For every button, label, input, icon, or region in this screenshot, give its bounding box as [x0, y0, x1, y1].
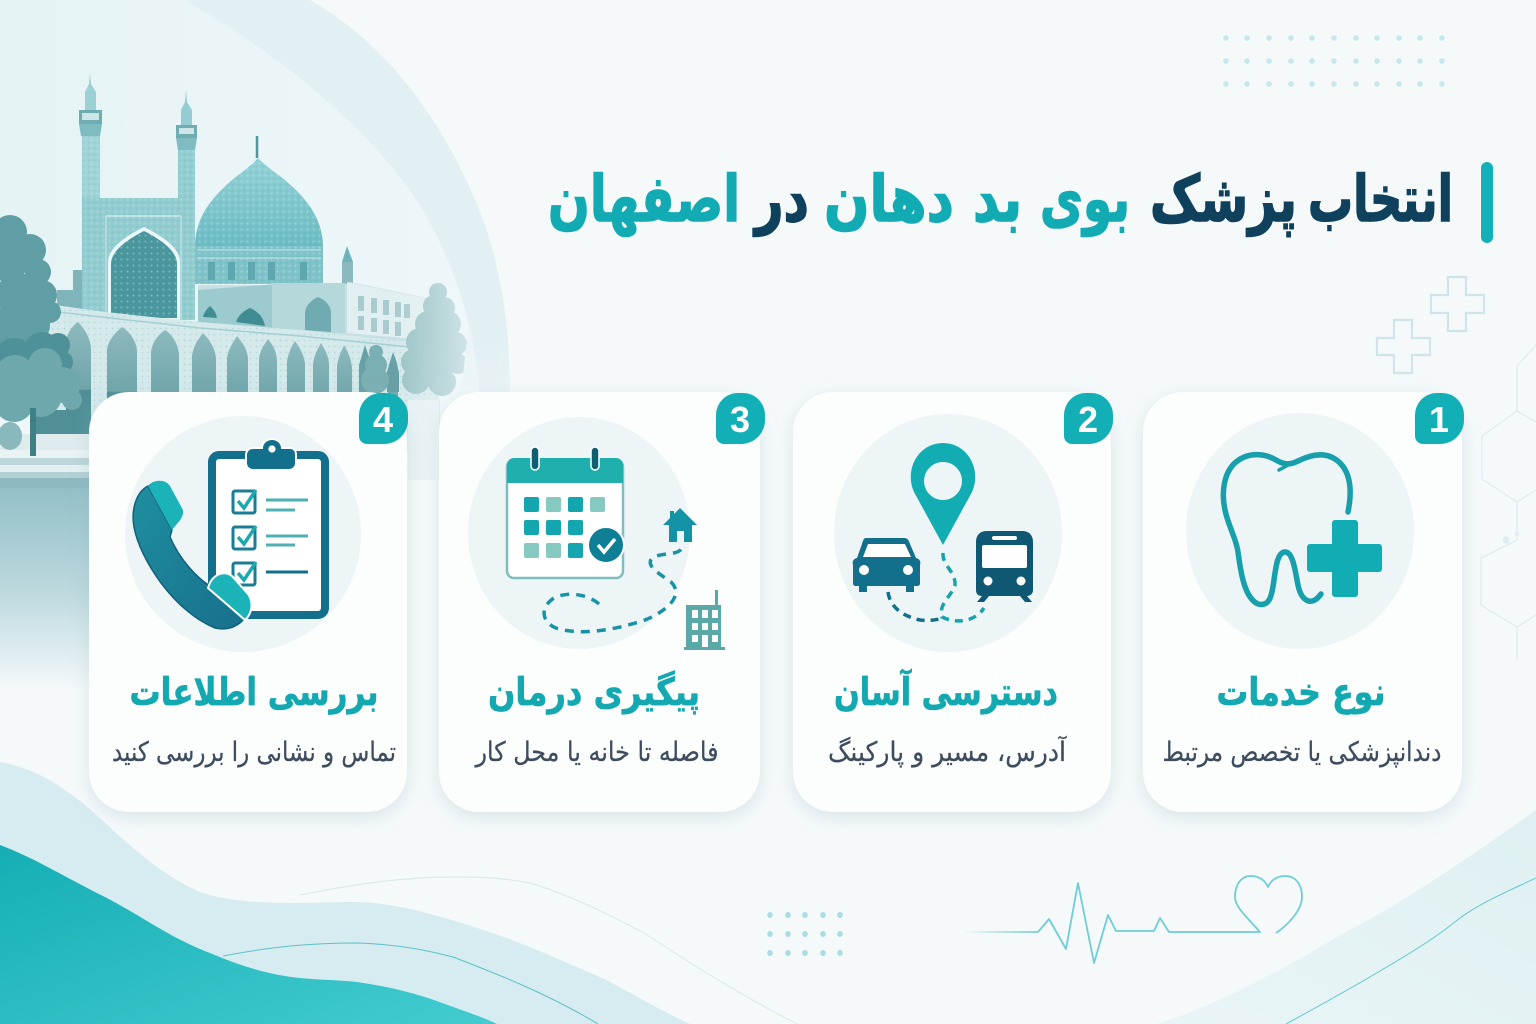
route: dashed path — [544, 547, 682, 632]
icon: building — [684, 590, 725, 650]
title: بد — [973, 163, 1022, 237]
heading: بررسی اطلاعات — [130, 670, 378, 714]
icon: house — [663, 508, 697, 542]
portal side wing — [57, 270, 82, 312]
bottom right accent line — [1286, 878, 1536, 1024]
icon: calendar — [507, 447, 624, 578]
icon circle — [468, 417, 690, 649]
heading: دسترسی آسان — [834, 668, 1058, 714]
icon: tooth — [1223, 455, 1350, 604]
panel: card 1 — [1143, 392, 1464, 812]
icon circle — [834, 414, 1062, 652]
icon: car — [853, 538, 920, 592]
step badge 2: 2 — [1078, 399, 1098, 440]
bottom teal wave — [0, 845, 497, 1024]
left trees — [0, 215, 82, 456]
panel: card 2 — [793, 392, 1113, 812]
background hexagon pattern — [1481, 345, 1536, 660]
column between cards — [408, 400, 439, 480]
ground and quay — [0, 434, 440, 488]
step badge 4 — [359, 393, 408, 444]
heading: پیگیری درمان — [488, 670, 700, 714]
title: دهان — [824, 163, 954, 237]
title: بوی — [1040, 163, 1130, 237]
main portal — [82, 198, 195, 320]
title: در — [753, 163, 809, 237]
bottom right light wave — [1156, 810, 1536, 1024]
bottom light wave — [0, 762, 690, 1024]
step badge 3: 3 — [730, 399, 750, 440]
step badge 4: 4 — [373, 399, 393, 440]
route: dashed paths — [888, 553, 984, 621]
description: تماس و نشانی را بررسی کنید — [112, 737, 396, 768]
decorative dots top — [1223, 35, 1445, 87]
title: اصفهان — [548, 163, 740, 237]
icon: location pin — [911, 443, 975, 545]
title: پزشک — [1150, 163, 1297, 237]
icon: outlined plus signs — [1377, 277, 1484, 373]
illustration: water reflection — [0, 488, 100, 688]
icon circle — [1186, 413, 1414, 649]
tooth notch — [1279, 464, 1290, 470]
icon circle — [125, 416, 361, 652]
icon: medical cross — [1307, 520, 1382, 597]
decorative dots bottom — [767, 912, 843, 956]
right minaret — [176, 90, 197, 208]
right trees — [359, 283, 467, 396]
small tower — [342, 246, 353, 284]
title accent bar — [1481, 162, 1493, 243]
panel: card 4 — [89, 392, 408, 812]
icon: heartbeat line and heart — [962, 876, 1302, 963]
left minaret — [79, 73, 102, 200]
bottom accent line — [223, 943, 598, 1024]
description: فاصله تا خانه یا محل کار — [474, 737, 718, 768]
arcade wall — [32, 305, 440, 436]
bottom faint line — [300, 877, 797, 1024]
dome — [195, 136, 323, 284]
title: انتخاب — [1308, 163, 1453, 237]
title — [548, 163, 1453, 237]
step badge 1: 1 — [1429, 399, 1449, 440]
panel: card 3 — [439, 392, 765, 812]
rear building with windows — [198, 282, 426, 342]
description: آدرس، مسیر و پارکینگ — [828, 736, 1067, 768]
icon: clipboard checklist — [212, 439, 325, 615]
step badge 2 — [1064, 393, 1113, 444]
step badge 1 — [1415, 393, 1464, 444]
step badge 3 — [716, 393, 765, 444]
icon: bus — [976, 531, 1033, 602]
illustration: Isfahan mosque — [0, 73, 505, 488]
icon: telephone handset — [133, 481, 252, 629]
description: دندانپزشکی یا تخصص مرتبط — [1162, 737, 1442, 768]
background arc: outer band and inner sky — [0, 0, 510, 392]
heading: نوع خدمات — [1216, 670, 1386, 714]
